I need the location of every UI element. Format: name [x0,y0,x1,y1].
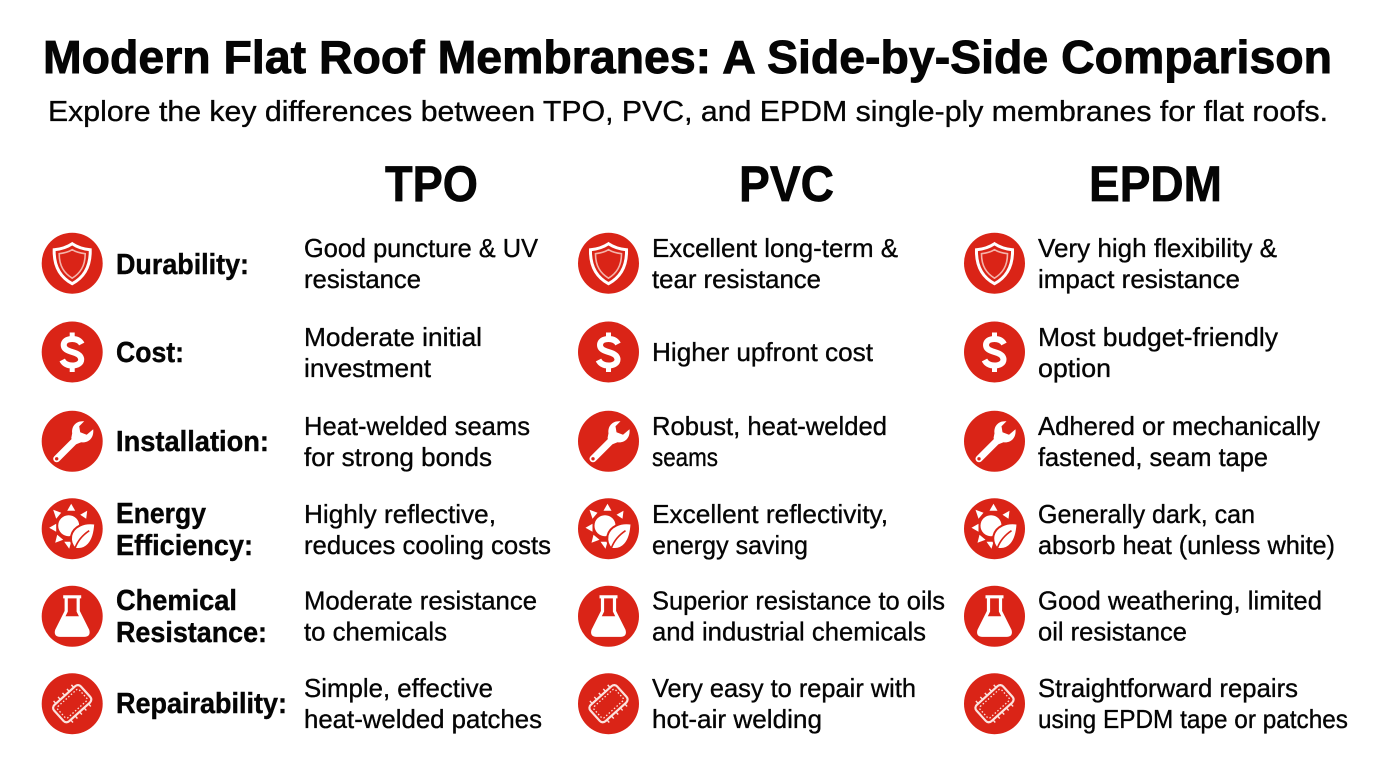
icon: sun and leaf [578,498,639,559]
icon: dollar [964,322,1025,382]
EPDM durability [1038,233,1277,294]
EPDM repairability: Straightforward repairs [1038,673,1298,703]
TPO durability: Good puncture & UV [304,233,539,263]
PVC cost: Higher upfront cost [652,337,874,367]
label: Installation: Installation: [116,426,269,458]
EPDM energy efficiency: absorb heat (unless white) [1038,530,1335,560]
label: Energy Efficiency [116,498,253,562]
TPO chemical resistance: to chemicals [304,616,447,646]
label: Chemical Resistance: Resistance: [116,617,267,649]
TPO repairability: heat-welded patches [304,704,542,734]
icon: flask [578,586,639,647]
PVC installation: Robust, heat-welded [652,411,887,441]
PVC chemical resistance: Superior resistance to oils [652,586,945,616]
TPO chemical resistance [304,586,537,646]
EPDM chemical resistance [1038,586,1322,646]
icon: sun and leaf [964,498,1025,559]
icon: patch [578,673,639,734]
EPDM installation: Adhered or mechanically [1038,411,1320,441]
icon: patch [964,673,1025,734]
label: Durability: Durability: [116,249,249,281]
EPDM energy efficiency: Generally dark, can [1038,499,1255,529]
PVC durability: tear resistance [652,264,821,294]
TPO installation [304,411,530,472]
column heading: EPDM: EPDM [1089,156,1222,212]
EPDM chemical resistance: oil resistance [1038,616,1187,646]
PVC installation: seams [652,442,718,472]
EPDM repairability [1038,673,1348,734]
TPO installation: Heat-welded seams [304,411,530,441]
icon: wrench [42,411,103,472]
label: Energy Efficiency: Efficiency: [116,530,253,562]
icon: shield [578,233,639,294]
column heading: PVC: PVC [739,156,834,212]
PVC repairability: hot-air welding [652,704,822,734]
icon: flask [964,586,1025,647]
label: Energy Efficiency: Energy [116,498,206,530]
icon: dollar [578,322,639,382]
icon: patch [42,673,103,734]
EPDM energy efficiency [1038,499,1335,560]
EPDM durability: impact resistance [1038,264,1240,294]
label: Chemical Resistance [116,585,267,649]
TPO repairability: Simple, effective [304,673,493,703]
label: Chemical Resistance: Chemical [116,585,237,617]
EPDM installation: fastened, seam tape [1038,442,1268,472]
label: Repairability: Repairability: [116,688,287,720]
icon: flask [42,586,103,647]
PVC energy efficiency: energy saving [652,530,808,560]
TPO energy efficiency [304,499,551,560]
EPDM installation [1038,411,1320,472]
TPO cost [304,322,482,383]
column: TPO [42,233,551,734]
icon: shield [42,233,103,294]
column heading: TPO: TPO [385,156,478,212]
EPDM cost [1038,322,1278,383]
EPDM chemical resistance: Good weathering, limited [1038,586,1322,616]
EPDM cost: Most budget-friendly [1038,322,1278,352]
TPO energy efficiency: reduces cooling costs [304,530,551,560]
column: PVC [578,233,945,734]
TPO chemical resistance: Moderate resistance [304,586,537,616]
TPO cost: Moderate initial [304,322,482,352]
label: Cost: Cost: [116,337,184,369]
EPDM repairability: using EPDM tape or patches [1038,704,1348,734]
icon: dollar [42,322,103,382]
TPO installation: for strong bonds [304,442,492,472]
PVC energy efficiency: Excellent reflectivity, [652,499,888,529]
TPO durability: resistance [304,264,421,294]
PVC durability [652,233,898,294]
TPO durability [304,233,539,294]
icon: wrench [578,411,639,472]
PVC chemical resistance: and industrial chemicals [652,616,926,646]
EPDM cost: option [1038,353,1111,383]
column: EPDM [964,233,1348,734]
PVC repairability: Very easy to repair with [652,673,916,703]
PVC chemical resistance [652,586,945,646]
PVC energy efficiency [652,499,888,560]
title: Modern Flat Roof Membranes: A Side-by-Side Comparison [43,31,1332,83]
PVC durability: Excellent long-term & [652,233,898,263]
subtitle: Explore the key differences between TPO, PVC, and EPDM single-ply membranes for flat roofs. [48,96,1328,128]
TPO energy efficiency: Highly reflective, [304,499,496,529]
PVC repairability [652,673,916,734]
EPDM durability: Very high flexibility & [1038,233,1277,263]
icon: sun and leaf [42,498,103,559]
TPO cost: investment [304,353,432,383]
icon: shield [964,233,1025,294]
TPO repairability [304,673,542,734]
icon: wrench [964,411,1025,472]
PVC installation [652,411,887,472]
row labels [116,249,287,720]
